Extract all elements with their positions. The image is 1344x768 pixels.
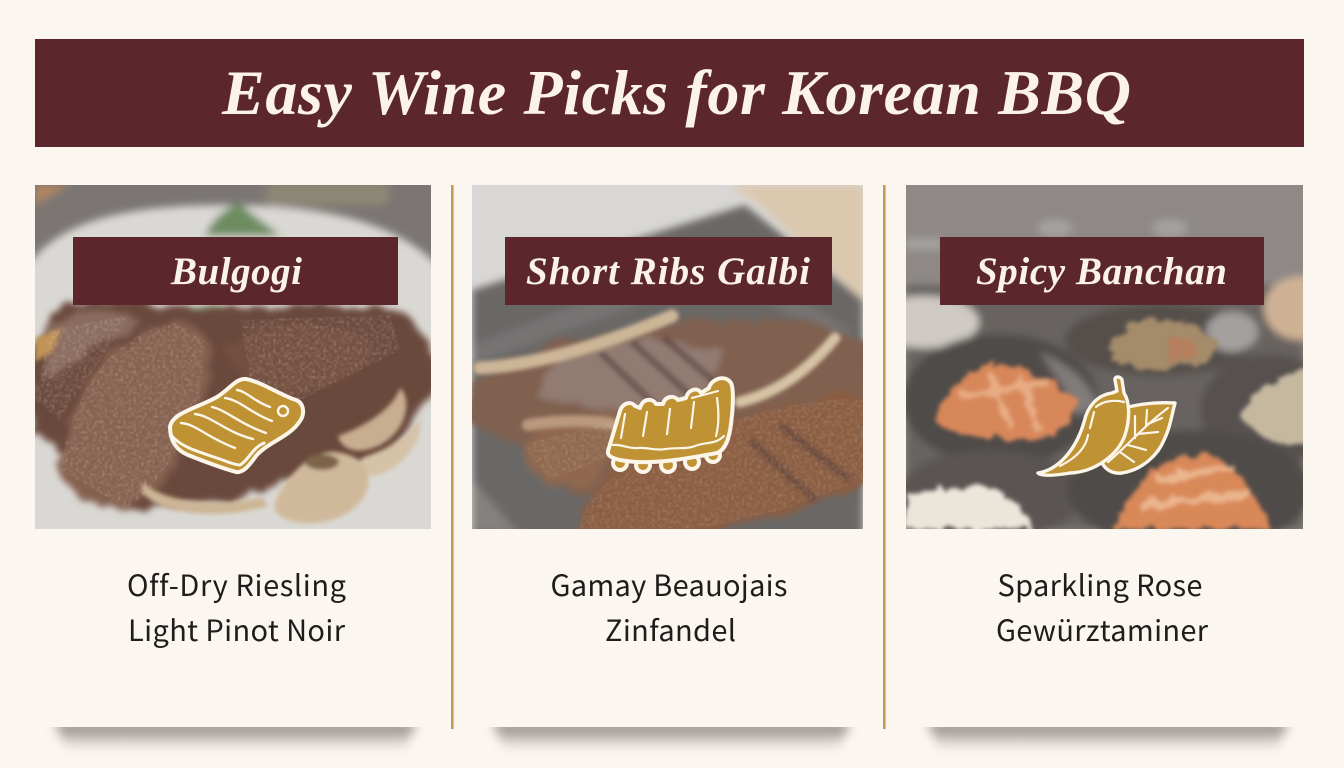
card shadow (50, 727, 420, 750)
divider 2 (883, 185, 886, 729)
card: Bulgogi (15, 183, 450, 752)
label: Short Ribs Galbi: Short Ribs Galbi (526, 250, 810, 293)
wine list: Bulgogi: Off-Dry Riesling (127, 563, 346, 605)
wine list: Short Ribs Galbi: Zinfandel (605, 608, 736, 650)
divider 1 (451, 185, 454, 729)
title banner: Easy Wine Picks for Korean BBQ (221, 57, 1131, 128)
wine list: Short Ribs Galbi (550, 563, 788, 650)
icon: chili and leaf (1038, 377, 1175, 475)
card shadow (924, 727, 1292, 750)
label: Bulgogi: Bulgogi (170, 250, 302, 293)
photo: banchan bowls (906, 185, 1303, 529)
photo: bulgogi plate (35, 185, 431, 529)
card: Short Ribs Galbi (468, 185, 868, 752)
wine list: Spicy Banchan: Sparkling Rose (998, 563, 1202, 605)
wine list: Bulgogi (127, 563, 346, 650)
wine list: Spicy Banchan: Gewürztaminer (996, 608, 1209, 650)
photo: grilled short ribs (468, 185, 868, 545)
wine list: Short Ribs Galbi: Gamay Beauojais (550, 563, 788, 605)
label: Spicy Banchan (940, 237, 1264, 305)
title banner (35, 39, 1304, 147)
card: Spicy Banchan (906, 185, 1303, 750)
card shadow (488, 727, 854, 750)
label: Short Ribs Galbi (505, 237, 832, 305)
wine list: Bulgogi: Light Pinot Noir (128, 608, 346, 650)
label: Spicy Banchan: Spicy Banchan (976, 250, 1227, 293)
icon: ribs rack (608, 378, 733, 472)
icon: meat slice (170, 379, 303, 472)
label: Bulgogi (73, 237, 398, 305)
wine list: Spicy Banchan (996, 563, 1209, 650)
